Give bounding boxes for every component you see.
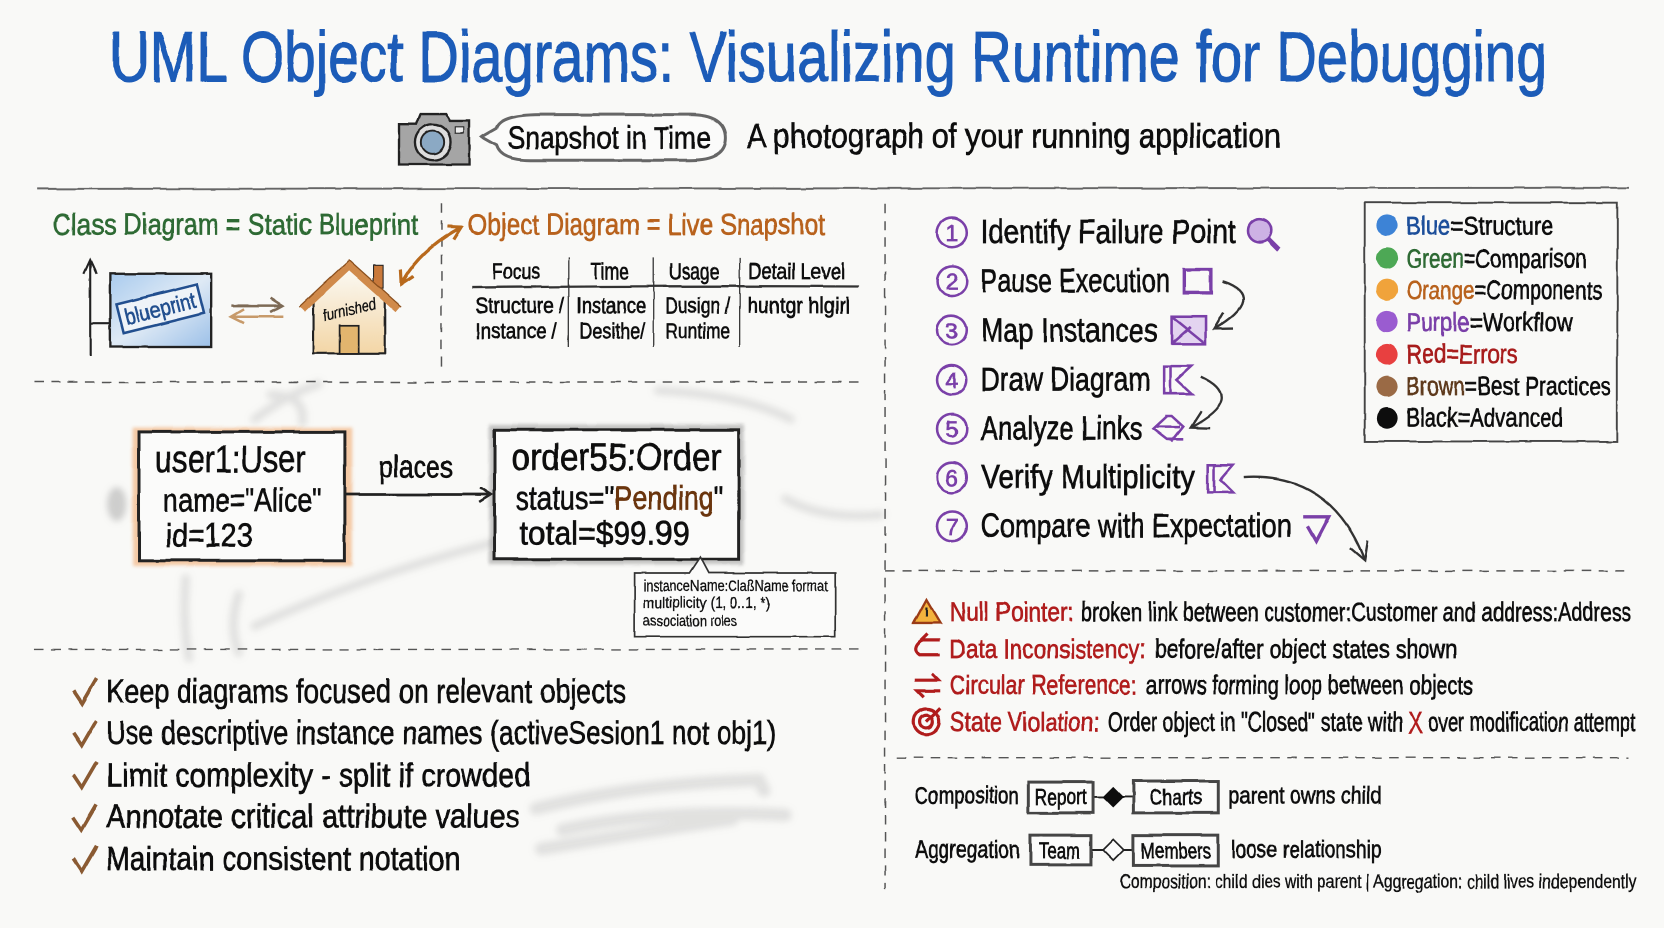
icon: house: furnished bbox=[321, 295, 379, 326]
panel: best practices: Keep diagrams focused on relevant objects bbox=[106, 673, 626, 709]
row: aggregation: Aggregation bbox=[915, 836, 1020, 863]
step circles: 4 bbox=[945, 367, 958, 393]
legend: Orange=Components bbox=[1406, 277, 1602, 305]
table: comparison: Structure / bbox=[475, 293, 565, 318]
object: user1: name="Alice" bbox=[163, 481, 322, 518]
panel: common errors: arrows forming loop between objects bbox=[1146, 670, 1473, 700]
step circles: 7 bbox=[945, 514, 958, 540]
panel: debugging workflow: Draw Diagram bbox=[981, 361, 1150, 398]
row: composition: Report bbox=[1035, 784, 1087, 809]
legend: Blue=Structure bbox=[1406, 213, 1554, 241]
table: comparison: Instance bbox=[576, 293, 646, 318]
object: order55 bbox=[495, 430, 739, 559]
row: composition: Charts bbox=[1149, 784, 1202, 809]
panel: common errors: Order object in "Closed" state with bbox=[1108, 707, 1403, 737]
panel: debugging workflow: Compare with Expectation bbox=[981, 507, 1292, 544]
step circles: 5 bbox=[945, 416, 958, 442]
arrow: blueprint to house bbox=[231, 298, 283, 323]
object: user1: user1:User bbox=[155, 438, 306, 481]
callout: notation note: instanceName:ClaßName format bbox=[643, 578, 828, 595]
row: composition bbox=[915, 781, 1382, 813]
table: comparison: huntgr hlgirl bbox=[747, 293, 850, 318]
object: order55: order55:Order bbox=[512, 436, 722, 479]
table: comparison: Detail Level bbox=[748, 259, 845, 284]
panel: debugging workflow: Identify Failure Point bbox=[981, 213, 1235, 250]
panel: best practices bbox=[73, 673, 776, 877]
icon: house bbox=[299, 260, 401, 353]
row: composition: parent owns child bbox=[1229, 782, 1382, 809]
panel: class vs object comparison bbox=[53, 209, 860, 355]
callout: notation note: multiplicity (1, 0..1, *) bbox=[643, 595, 770, 612]
step circles bbox=[937, 218, 967, 541]
legend: Purple=Workflow bbox=[1406, 309, 1573, 337]
panel: common errors: Data Inconsistency: bbox=[950, 634, 1146, 664]
panel: debugging workflow: Analyze Links bbox=[981, 409, 1143, 446]
row: aggregation: Members bbox=[1141, 838, 1211, 863]
callout: snapshot in time: Snapshot in Time bbox=[507, 120, 711, 156]
object: order55: total=$99.99 bbox=[520, 514, 690, 551]
step circles: 2 bbox=[945, 269, 958, 295]
callout: notation note: association roles bbox=[643, 613, 738, 630]
arrow: places: places bbox=[379, 449, 453, 485]
step circles: 3 bbox=[945, 318, 958, 344]
step circles: 1 bbox=[945, 220, 958, 246]
table: comparison: Dusign / bbox=[665, 293, 731, 318]
panel: debugging workflow bbox=[937, 213, 1365, 560]
panel: debugging workflow: Verify Multiplicity bbox=[981, 458, 1195, 495]
object: order55: status="Pending" bbox=[516, 479, 724, 516]
icon: camera bbox=[399, 114, 469, 164]
panel: best practices: Annotate critical attribute values bbox=[106, 798, 520, 835]
arrows: workflow flow bbox=[1191, 281, 1365, 560]
icons: workflow steps bbox=[1154, 219, 1329, 541]
row: aggregation bbox=[915, 835, 1382, 866]
heading: object diagram: Object Diagram = Live Snapshot bbox=[468, 209, 825, 242]
panel: best practices: Maintain consistent notation bbox=[106, 840, 461, 877]
step circles: 6 bbox=[945, 465, 958, 491]
panel: best practices: Limit complexity - split if crowded bbox=[106, 756, 531, 793]
legend: Brown=Best Practices bbox=[1406, 373, 1611, 401]
arrow: house to object diagram bbox=[401, 227, 462, 284]
subtitle: A photograph of your running application bbox=[747, 118, 1281, 156]
callout: notation note bbox=[635, 557, 835, 637]
panel: common errors: Circular Reference: bbox=[950, 670, 1138, 700]
table: comparison: Time bbox=[590, 259, 629, 284]
icon: blueprint bbox=[84, 260, 211, 355]
panel: debugging workflow: Pause Execution bbox=[981, 262, 1169, 299]
panel: composition vs aggregation bbox=[915, 781, 1637, 893]
legend: Black=Advanced bbox=[1406, 405, 1563, 433]
table: comparison: Usage bbox=[669, 259, 720, 284]
legend bbox=[1365, 203, 1617, 441]
table: comparison bbox=[472, 258, 860, 347]
panel: common errors: X bbox=[1408, 704, 1423, 740]
panel: object diagram example bbox=[133, 424, 835, 637]
panel: common errors: Null Pointer: bbox=[950, 597, 1074, 627]
panel: debugging workflow: Map Instances bbox=[981, 312, 1158, 349]
legend: Red=Errors bbox=[1406, 341, 1518, 369]
icon: blueprint: blueprint bbox=[122, 288, 199, 330]
table: comparison: Runtime bbox=[665, 319, 730, 344]
legend: Green=Comparison bbox=[1406, 245, 1587, 273]
table: comparison: Focus bbox=[492, 259, 540, 284]
panel: best practices: Use descriptive instance names (activeSesion1 not obj1) bbox=[106, 714, 776, 751]
object: user1 bbox=[139, 432, 345, 560]
panel: common errors: before/after object states shown bbox=[1155, 634, 1457, 664]
table: comparison: Instance / bbox=[475, 319, 558, 344]
panel: common errors: State Violation: bbox=[950, 707, 1099, 737]
row: composition: Composition bbox=[915, 782, 1019, 809]
object: user1: id=123 bbox=[166, 517, 253, 554]
panel: common errors bbox=[914, 597, 1636, 740]
callout: snapshot in time bbox=[482, 115, 726, 160]
row: aggregation: Team bbox=[1039, 838, 1080, 863]
row: aggregation: loose relationship bbox=[1231, 836, 1382, 863]
icons: errors bbox=[914, 600, 940, 734]
table: comparison: Desithe/ bbox=[579, 319, 646, 344]
heading: class diagram: Class Diagram = Static Blueprint bbox=[53, 209, 419, 242]
